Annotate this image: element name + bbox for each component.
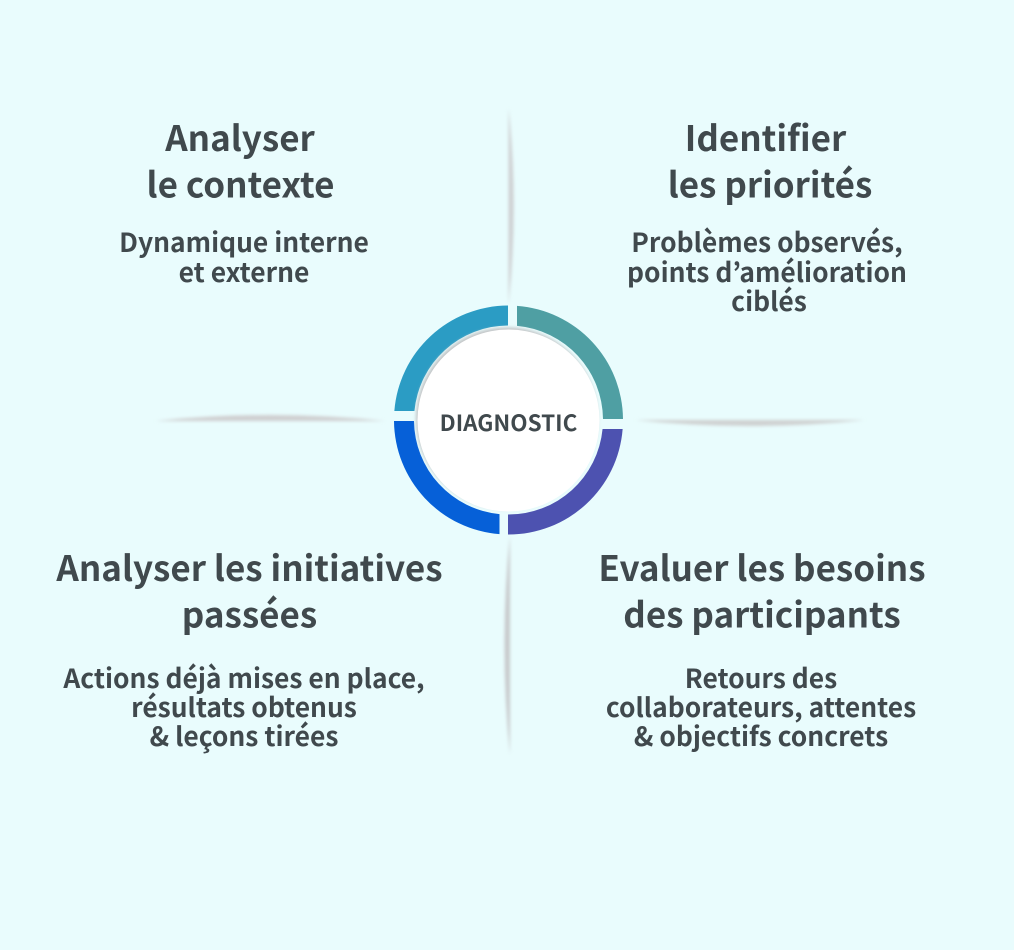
description: Retours des bbox=[685, 657, 837, 696]
block: analyser les initiatives passées bbox=[55, 541, 443, 754]
description: & objectifs concrets bbox=[634, 715, 888, 754]
description: ciblés bbox=[731, 280, 807, 319]
description: collaborateurs, attentes bbox=[606, 686, 916, 725]
heading: les priorités bbox=[668, 158, 872, 208]
description: points d’amélioration bbox=[627, 251, 907, 290]
shadow line: right bbox=[635, 420, 865, 426]
heading: Analyser bbox=[164, 111, 316, 162]
shadow line: bottom bbox=[504, 535, 510, 755]
description: & leçons tirées bbox=[150, 715, 338, 754]
ring segment: top right bbox=[517, 306, 623, 419]
ring segment: bottom left bbox=[394, 421, 500, 534]
ring segment: top left bbox=[394, 306, 508, 411]
block: identifier les priorités bbox=[627, 111, 907, 319]
description: résultats obtenus bbox=[131, 686, 357, 725]
heading: des participants bbox=[623, 588, 901, 638]
heading: Analyser les initiatives bbox=[55, 541, 443, 592]
heading: Evaluer les besoins bbox=[598, 541, 926, 592]
block: analyser le contexte bbox=[119, 111, 369, 290]
block: evaluer les besoins des participants bbox=[598, 541, 926, 754]
description: Problèmes observés, bbox=[631, 221, 903, 260]
description: et externe bbox=[179, 251, 309, 290]
diagnostic ring bbox=[394, 306, 623, 535]
ring segment: bottom right bbox=[508, 429, 623, 535]
heading: passées bbox=[182, 588, 317, 638]
center label: DIAGNOSTIC bbox=[440, 406, 578, 438]
description: Dynamique interne bbox=[119, 221, 369, 260]
description: Actions déjà mises en place, bbox=[62, 657, 425, 696]
shadow line: left bbox=[155, 415, 385, 421]
center circle bbox=[415, 326, 602, 514]
heading: Identifier bbox=[685, 111, 847, 162]
shadow line: top bbox=[508, 108, 514, 305]
heading: le contexte bbox=[147, 158, 334, 208]
